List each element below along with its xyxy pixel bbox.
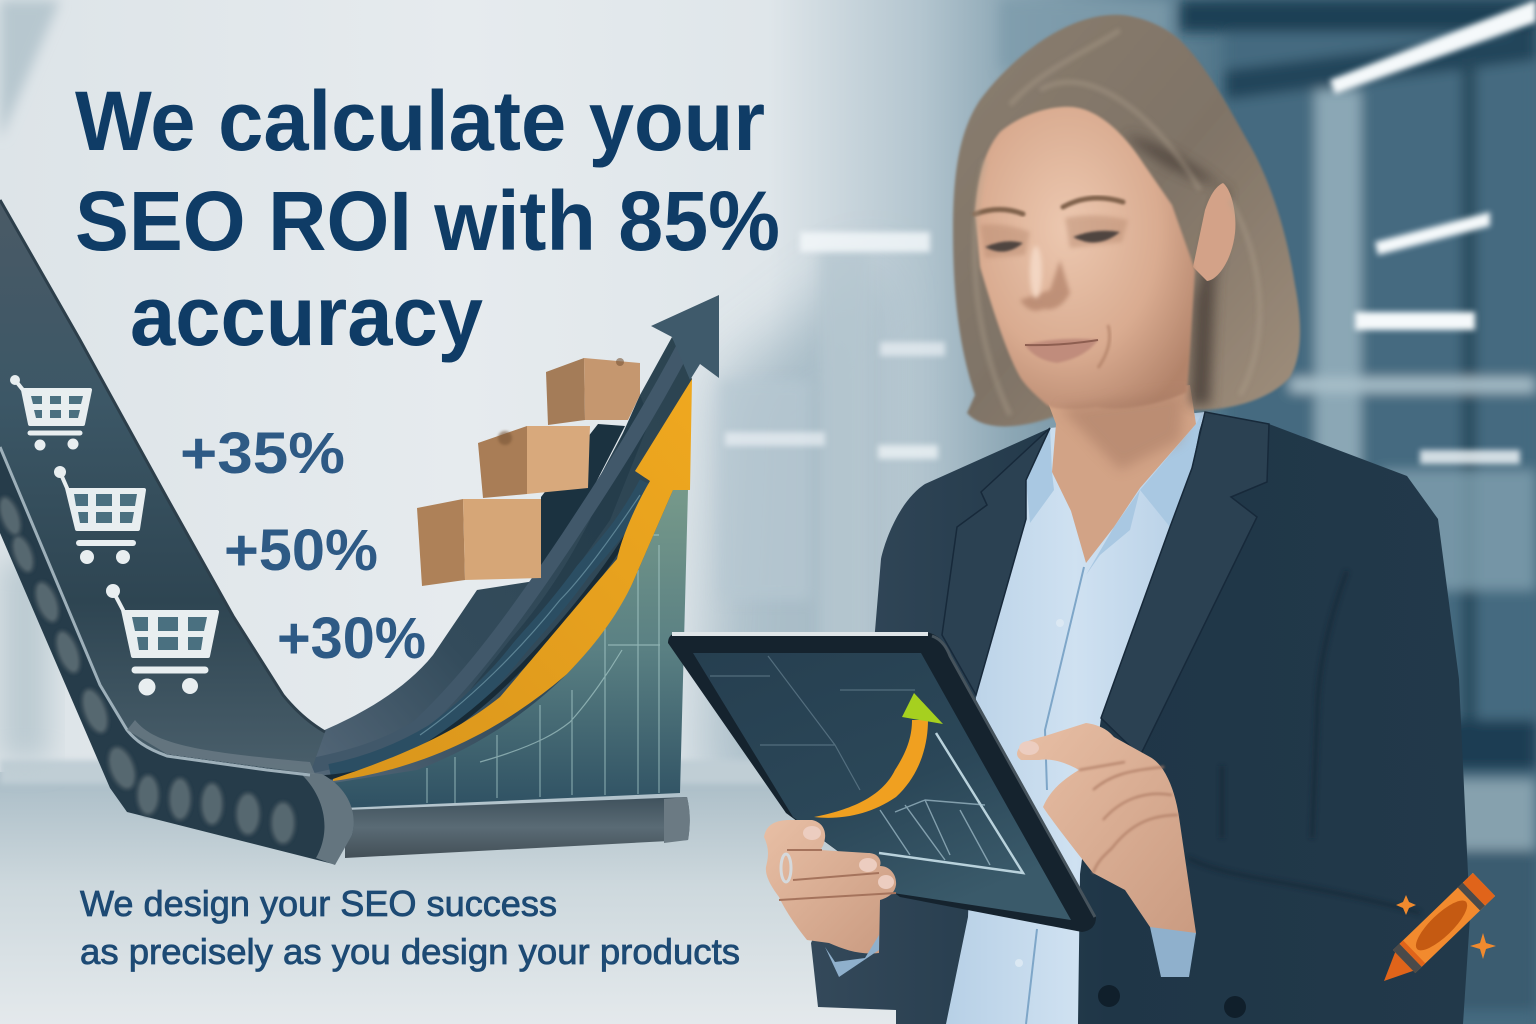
arrow: orange: [333, 379, 692, 781]
left hand: [764, 820, 896, 953]
belt side with rollers: [0, 447, 354, 865]
conveyor belt graph: [0, 200, 719, 865]
percentage labels: +30%: [277, 606, 426, 671]
face: [975, 107, 1235, 470]
woman: [811, 15, 1470, 1024]
title: accuracy: [130, 269, 483, 363]
hair strands: [975, 30, 1260, 415]
subtitle: We design your SEO success: [80, 883, 557, 924]
icon: shopping cart 1: [10, 375, 90, 450]
collar: [1026, 412, 1203, 575]
smile line: [1098, 325, 1110, 368]
cardboard boxes: [417, 358, 640, 586]
right hand with pointing finger: [1017, 723, 1196, 947]
blazer: [811, 412, 1470, 1024]
logo: crayon: [1373, 873, 1495, 993]
roller base: [345, 797, 690, 858]
shirt: [946, 412, 1205, 1024]
icon: growth arrow on screen: [814, 693, 943, 818]
box bottom: [417, 499, 541, 586]
blazer creases: [1188, 571, 1420, 913]
shirt cuffs: [825, 927, 1196, 977]
eyes: [985, 231, 1120, 252]
nose: [1020, 260, 1070, 311]
chart area under curve: [333, 480, 688, 808]
icon: shopping cart 3: [106, 584, 217, 696]
percentage labels: +50%: [224, 518, 378, 583]
dark hair by ear: [1125, 135, 1228, 405]
mouth: [1025, 339, 1098, 363]
shirt placket: [1015, 567, 1084, 1024]
neck shadow: [1060, 392, 1185, 470]
arrow: dark head: [651, 295, 719, 380]
ear: [1193, 183, 1235, 281]
rising dark band: [300, 337, 692, 783]
title: We calculate your: [75, 74, 765, 168]
subtitle: as precisely as you design your products: [80, 931, 740, 972]
tablet: [668, 632, 1096, 932]
box middle: [478, 426, 590, 498]
subtitle: [80, 883, 740, 972]
eye sockets: [980, 215, 1128, 258]
neck: [1047, 385, 1196, 563]
title: [75, 74, 780, 363]
title: SEO ROI with 85%: [75, 174, 780, 268]
lapels: [942, 412, 1269, 756]
percentage labels: [180, 421, 426, 671]
tablet screen: [693, 653, 1071, 920]
hair back: [953, 15, 1300, 426]
eyebrows: [975, 198, 1123, 214]
percentage labels: +35%: [180, 421, 345, 486]
icon: shopping cart 2: [54, 466, 144, 564]
icon: sparkles: [1396, 895, 1496, 959]
box top: [546, 358, 640, 425]
belt surface: [0, 200, 325, 775]
jacket buttons: [1098, 985, 1246, 1018]
